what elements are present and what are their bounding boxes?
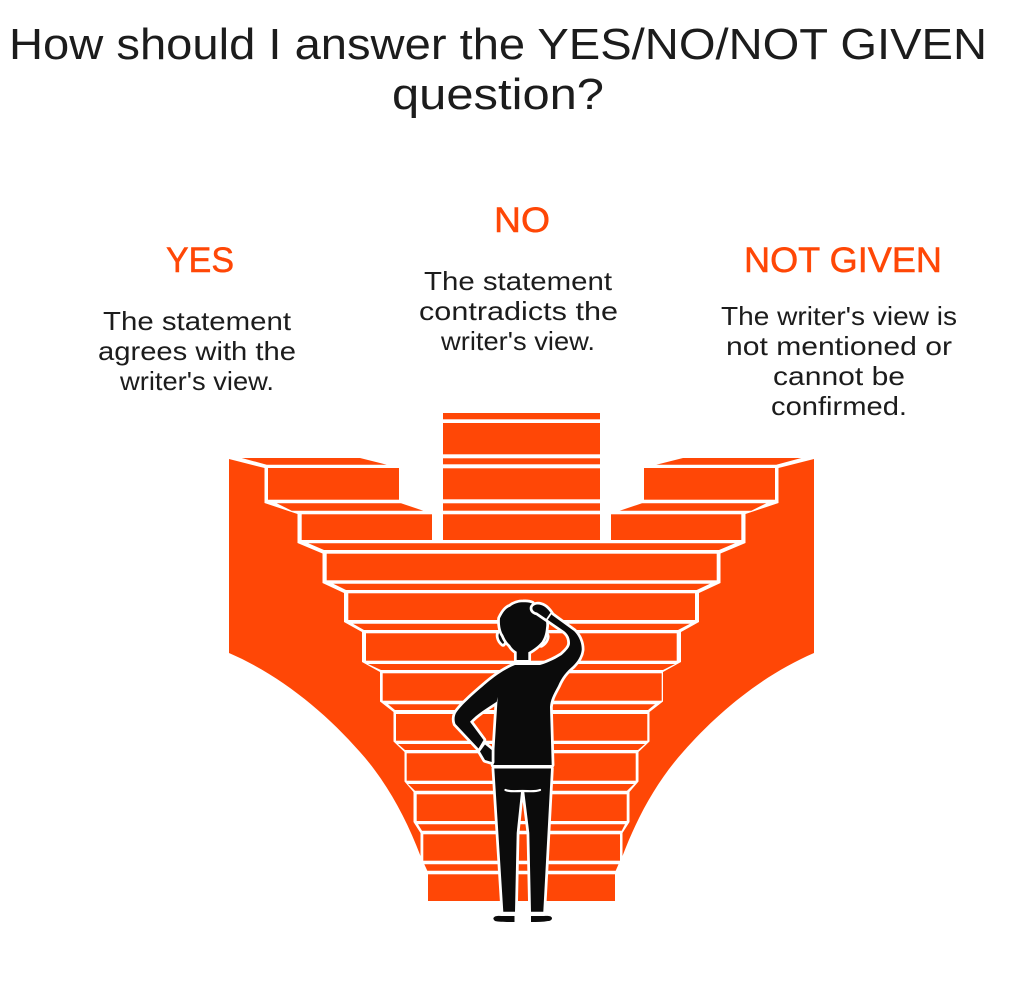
heading: NO: NO	[494, 201, 550, 240]
text block: YES description: The statement	[103, 306, 292, 336]
trouser pocket line	[506, 790, 540, 791]
text block: NO description: contradicts the	[419, 296, 618, 326]
text block: NO description	[419, 266, 618, 356]
text block: NOT GIVEN description: The writer's view is	[721, 301, 957, 331]
text block: NOT GIVEN description	[721, 301, 957, 421]
right ear	[539, 634, 547, 645]
panel: NOT GIVEN	[721, 241, 957, 421]
legs	[494, 768, 551, 912]
right stair wall	[611, 458, 814, 856]
right shoe	[531, 916, 552, 922]
text block: NOT GIVEN description: confirmed.	[771, 391, 907, 421]
title: How should I answer the YES/NO/NOT GIVEN	[9, 20, 987, 69]
heading: YES: YES	[166, 241, 234, 280]
heading: NOT GIVEN: NOT GIVEN	[744, 241, 942, 280]
text block: YES description: agrees with the	[98, 336, 296, 366]
text block: YES description	[98, 306, 296, 396]
panel: NO	[419, 201, 618, 356]
text block: NOT GIVEN description: not mentioned or	[726, 331, 952, 361]
middle column stairs	[443, 413, 600, 540]
torso and raised arm	[455, 605, 582, 765]
title	[9, 20, 987, 119]
hand on hip	[480, 744, 492, 762]
central descending stairs	[308, 543, 735, 901]
left stair wall	[229, 458, 432, 856]
panel: YES	[98, 241, 296, 396]
text block: YES description: writer's view.	[119, 366, 274, 396]
shirt cuff line	[546, 612, 552, 620]
staircase illustration	[229, 413, 814, 901]
head	[500, 602, 546, 660]
text block: NOT GIVEN description: cannot be	[773, 361, 905, 391]
person scratching head	[455, 602, 582, 922]
left ear	[499, 632, 506, 644]
left shoe	[493, 916, 514, 922]
title: question?	[392, 70, 604, 119]
text block: NO description: writer's view.	[440, 326, 595, 356]
text block: NO description: The statement	[424, 266, 613, 296]
